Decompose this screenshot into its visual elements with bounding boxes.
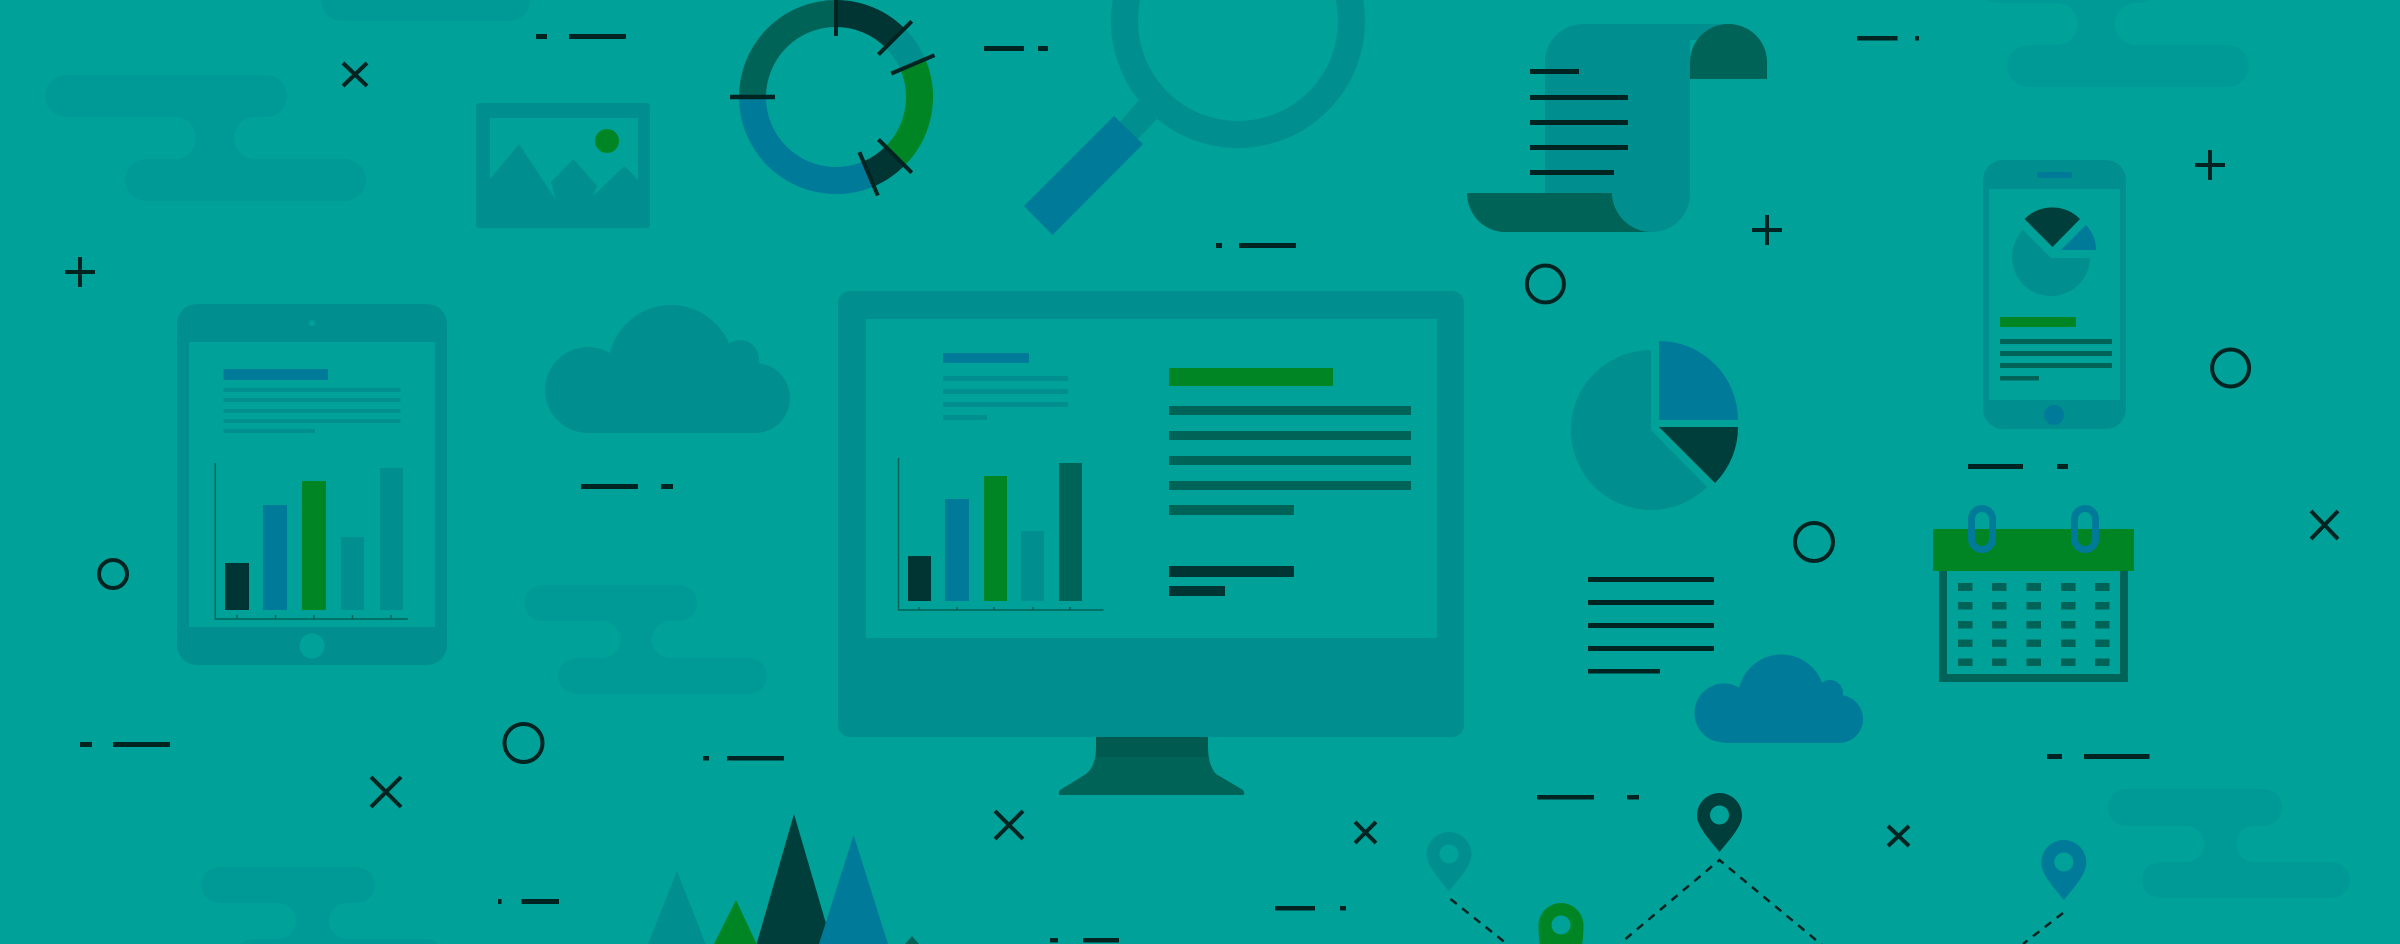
icon: blue cloud bbox=[1694, 654, 1863, 743]
icon: tablet with bar chart bbox=[177, 304, 447, 665]
icon: cloud bbox=[545, 305, 790, 433]
chart: triangle peaks bbox=[648, 814, 919, 944]
decorative shape: bottom right connector bbox=[2108, 789, 2350, 898]
decorative shape: middle connector bbox=[524, 585, 767, 694]
icon: paper scroll bbox=[1467, 24, 1767, 232]
decorative shape: top bar bbox=[321, 0, 530, 21]
decoration: ring marks bbox=[99, 266, 2249, 762]
chart: large pie bbox=[1571, 341, 1738, 510]
decoration: plus marks bbox=[65, 150, 2225, 287]
icon: picture frame bbox=[476, 103, 650, 228]
icon: dark map pin bbox=[1697, 793, 1742, 852]
decorative shape: top right connector bbox=[1975, 0, 2249, 87]
icon: blue map pin bbox=[2041, 840, 2086, 900]
text lines under pie bbox=[1588, 577, 1714, 674]
decorative shape: top left connector bbox=[45, 75, 366, 201]
decorative shape: bottom left connector bbox=[201, 867, 444, 944]
icon: smartphone with pie bbox=[1983, 160, 2126, 429]
decoration: cross marks bbox=[343, 63, 2338, 846]
icon: calendar bbox=[1933, 508, 2134, 678]
icon: teal map pin bbox=[1426, 832, 1472, 891]
map route: dashed lines bbox=[1450, 860, 2063, 944]
icon: desktop monitor with report bbox=[838, 291, 1464, 795]
icon: magnifying glass bbox=[1024, 0, 1352, 235]
icon: green map pin bbox=[1538, 903, 1584, 944]
chart: donut ring bbox=[730, 0, 934, 196]
